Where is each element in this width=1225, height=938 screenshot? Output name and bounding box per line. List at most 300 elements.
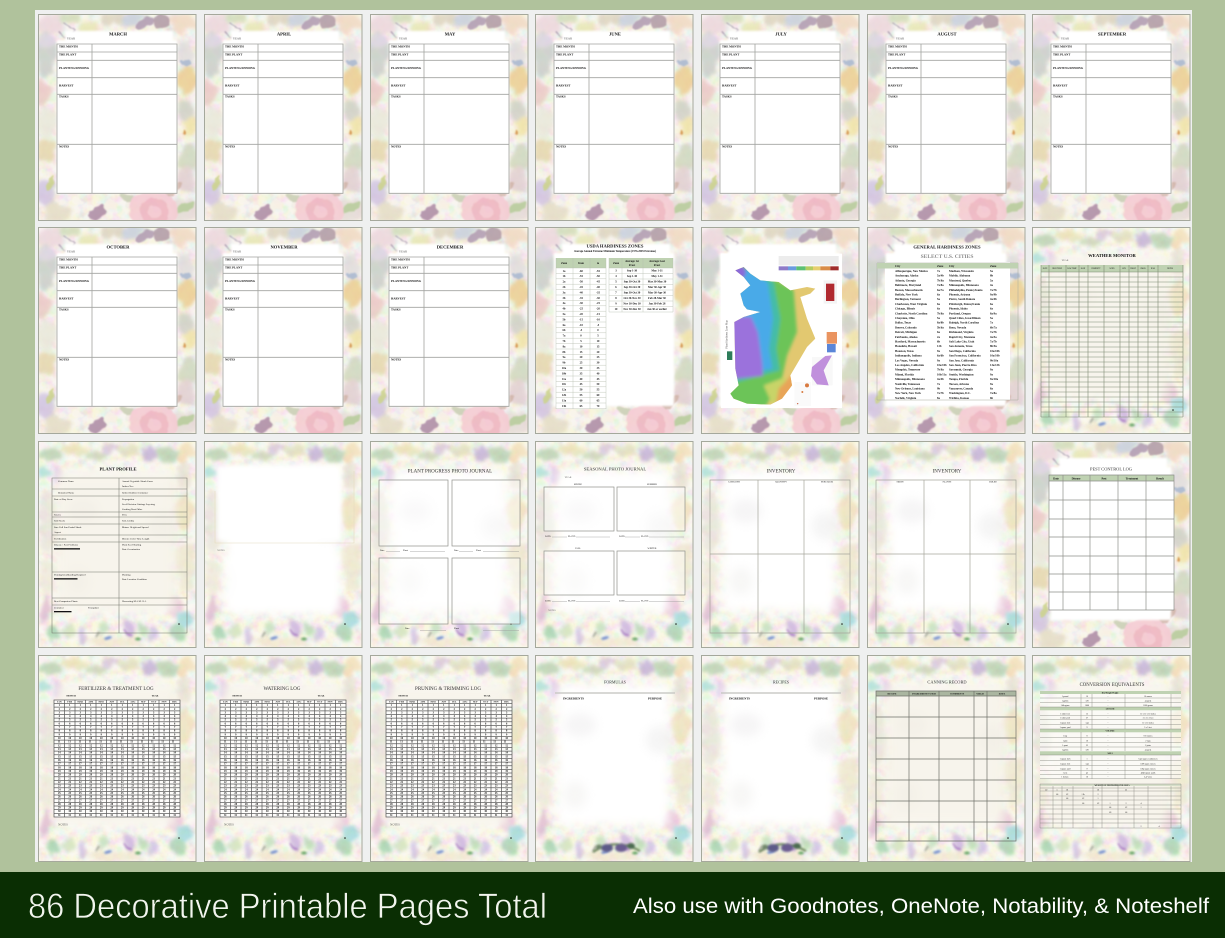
field labels: TASKS xyxy=(59,308,69,312)
panel: December page xyxy=(366,226,531,443)
table: cities and zones: Dallas, Texas xyxy=(895,321,912,325)
heading: December: DECEMBER xyxy=(437,244,464,250)
form labels: Source xyxy=(54,514,62,516)
log calendar numbers: 21 21 21 21 21 21 21 21 21 21 21 21 xyxy=(58,777,177,780)
log calendar numbers: NOV xyxy=(328,700,333,704)
table: weather log: NOTES xyxy=(1167,268,1173,270)
log calendar numbers: JUN xyxy=(441,700,446,704)
date and plant lines: PLANT: xyxy=(568,535,576,538)
field labels: HARVEST xyxy=(391,297,405,301)
subheading: select cities: SELECT U.S. CITIES xyxy=(921,254,973,260)
table: cities and zones: 9a xyxy=(937,349,940,353)
log calendar numbers: MAR xyxy=(77,700,83,704)
log calendar numbers: 12 12 12 12 12 12 12 12 12 12 12 12 xyxy=(224,744,343,747)
table: frost dates: Mar 30-Apr 30 xyxy=(648,292,667,294)
field labels: HARVEST xyxy=(225,297,239,301)
table: cities and zones: 6b xyxy=(990,396,993,400)
log calendar numbers: 9 9 9 9 9 9 9 9 9 9 9 9 xyxy=(225,733,342,736)
table: application rates: 1 xyxy=(1110,803,1111,805)
log calendar numbers: 3 3 3 3 3 3 3 3 3 3 3 3 xyxy=(225,711,342,714)
table: cities and zones: Madison, Wisconsin xyxy=(949,269,974,273)
table: measure conversions: = xyxy=(1107,740,1109,742)
table: zone temperatures: 5 xyxy=(597,335,599,338)
table: cities and zones: 5a xyxy=(990,269,993,273)
table: zone temperatures: 5b xyxy=(563,318,566,321)
table: zone temperatures: 35 xyxy=(580,372,583,375)
date and plant lines: PLANT: xyxy=(641,600,649,602)
table: zone temperatures: 70 xyxy=(597,405,600,408)
field labels: THE MONTH xyxy=(888,44,907,48)
log calendar numbers: 10 10 10 10 10 10 10 10 10 10 10 10 xyxy=(58,737,177,740)
table: measure conversions: 1 square inch xyxy=(1060,757,1070,760)
date and plant lines: Plant: xyxy=(476,550,481,552)
form labels: Grafting Root Other xyxy=(122,508,142,511)
heading: inventory: INVENTORY xyxy=(933,470,962,474)
log calendar numbers: 3 3 3 3 3 3 3 3 3 3 3 3 xyxy=(391,711,508,714)
table: measure conversions: = xyxy=(1107,718,1109,720)
panel: August page xyxy=(863,13,1028,230)
table: zone temperatures: -10 xyxy=(596,318,600,321)
form labels: Seed Division Cuttings Layering xyxy=(122,503,156,506)
log calendar numbers: 11 11 11 11 11 11 11 11 11 11 11 11 xyxy=(390,741,507,744)
table: application rates: 1/2 xyxy=(1066,794,1068,796)
table: zone temperatures: 10 xyxy=(580,345,583,348)
log calendar numbers: 2 2 2 2 2 2 2 2 2 2 2 2 xyxy=(59,708,176,711)
table: measure conversions: = xyxy=(1107,696,1109,698)
field labels: THE PLANT xyxy=(59,266,76,270)
inset: Alaska xyxy=(811,355,833,385)
log calendar numbers: 2 2 2 2 2 2 2 2 2 2 2 2 xyxy=(391,708,508,711)
table: cities and zones: Zone xyxy=(990,264,997,268)
month and year labels xyxy=(398,694,491,698)
log calendar numbers: 29 29 29 29 29 29 29 29 29 29 29 29 xyxy=(390,807,509,810)
field labels: PLANTING/SEEDING xyxy=(59,66,90,70)
subheading: Average Annual Extreme Minimum Temperature (1976-2005 Extremes) xyxy=(574,250,656,253)
notes label: NOTES xyxy=(224,822,234,826)
panel: inventory page one xyxy=(701,441,860,648)
field labels: NOTES xyxy=(225,358,236,362)
log calendar numbers: 16 16 16 16 16 16 16 16 16 16 16 16 xyxy=(224,759,343,762)
field labels: THE MONTH xyxy=(391,258,410,262)
table: weather log: HUMIDITY xyxy=(1091,268,1101,270)
table: measure conversions: 2.47 acres xyxy=(1144,777,1152,779)
log calendar numbers: 12 12 12 12 12 12 12 12 12 12 12 12 xyxy=(390,744,509,747)
table: cities and zones: 7a xyxy=(990,321,993,325)
table: pest log: Treatment xyxy=(1126,477,1138,480)
month and year labels: MONTH xyxy=(66,694,76,698)
table: zone temperatures: 50 xyxy=(597,383,600,386)
table: measure conversions: 1000 grams xyxy=(1143,704,1153,707)
panel: notes page xyxy=(204,441,362,648)
table: cities and zones: New Orleans, Louisiana xyxy=(895,386,925,390)
panel: July page xyxy=(697,13,862,230)
table: cities and zones: Salt Lake City, Utah xyxy=(949,340,975,344)
table: measure conversions: 144 xyxy=(1086,763,1088,765)
photo area outline xyxy=(215,471,354,543)
table: weather log: RAIN xyxy=(1081,267,1086,270)
log calendar numbers: 7 7 7 7 7 7 7 7 7 7 7 7 xyxy=(391,726,508,729)
log calendar numbers: 6 6 6 6 6 6 6 6 6 6 6 6 xyxy=(391,722,508,725)
log calendar numbers: DEC xyxy=(504,700,510,704)
table: measure conversions: 16 xyxy=(1086,740,1088,742)
table: measure conversions: = xyxy=(1107,700,1109,702)
column headers: BULBS xyxy=(989,482,997,484)
table: zone temperatures: -20 xyxy=(596,308,600,311)
table: measure conversions: 1 gallon xyxy=(1062,699,1068,702)
log calendar numbers: 5 5 5 5 5 5 5 5 5 5 5 5 xyxy=(391,719,508,722)
table: weather log xyxy=(1041,265,1183,417)
field labels: NOTES xyxy=(556,144,567,148)
table: cities and zones: 6a/7a xyxy=(937,288,944,292)
field labels xyxy=(556,44,587,148)
table: measure conversions: = xyxy=(1107,705,1109,707)
table: measure conversions: 1 acre xyxy=(1063,772,1068,774)
table: cities and zones: Richmond, Virginia xyxy=(949,330,974,334)
log calendar numbers: 31 31 31 31 31 31 31 31 31 31 31 31 xyxy=(58,814,177,817)
table: cities and zones: 7b/8a xyxy=(937,278,944,282)
field labels: HARVEST xyxy=(59,297,73,301)
field labels xyxy=(225,44,256,148)
field labels: NOTES xyxy=(59,144,70,148)
table: pest log xyxy=(1049,475,1174,610)
date and plant lines: PLANT: xyxy=(568,600,576,602)
log calendar numbers: DEC xyxy=(172,700,178,704)
table: frost dates: 5 xyxy=(615,280,617,284)
field labels: NOTES xyxy=(391,358,402,362)
panel: USDA hardiness zones page xyxy=(531,226,696,443)
log calendar numbers: 22 22 22 22 22 22 22 22 22 22 22 22 xyxy=(390,781,509,784)
notes label: NOTES xyxy=(390,822,400,826)
table: cities and zones: 6a xyxy=(937,330,940,334)
table: cities and zones: 4a/5a xyxy=(990,335,997,339)
panel: recipes page xyxy=(701,655,860,862)
table: measure conversions: 1 square foot xyxy=(1060,762,1071,765)
log calendar numbers: 21 21 21 21 21 21 21 21 21 21 21 21 xyxy=(224,777,343,780)
log calendar numbers: 10 10 10 10 10 10 10 10 10 10 10 10 xyxy=(390,737,509,740)
heading: May: MAY xyxy=(445,32,456,36)
form labels: Common Name xyxy=(58,480,75,483)
log calendar numbers: 11 11 11 11 11 11 11 11 11 11 11 11 xyxy=(58,741,175,744)
table: zone temperatures: 0 xyxy=(597,329,599,332)
table: application rates: 1/2 xyxy=(1125,807,1127,809)
table: measure conversions: = xyxy=(1107,749,1109,751)
table: measure conversions: 6.45 square centimeters xyxy=(1139,757,1158,760)
table: cities and zones: 6b xyxy=(937,340,940,344)
table: application rates: 1/4 xyxy=(1082,803,1084,805)
table: cities and zones: Philadelphia, Pennsylvania xyxy=(949,288,983,292)
field labels: THE PLANT xyxy=(722,52,739,56)
column headers xyxy=(728,480,834,484)
table: cities and zones: 7a/7b xyxy=(990,340,997,344)
date and plant lines: DATE: xyxy=(619,535,626,538)
table: weather log: SNOW xyxy=(1140,268,1146,270)
form labels xyxy=(54,480,156,610)
panel: canning record page xyxy=(867,655,1026,862)
table: frost dates: Sep 30-Oct 30 xyxy=(624,280,641,284)
log calendar numbers: SEP xyxy=(473,700,478,704)
table: cities and zones: Albuquerque, New Mexico xyxy=(895,269,929,273)
table: frost dates: May 1-31 xyxy=(651,275,663,278)
field labels: THE PLANT xyxy=(225,52,242,56)
log calendar numbers: AUG xyxy=(130,700,136,704)
field labels: TASKS xyxy=(1053,94,1063,98)
log calendar numbers: 20 20 20 20 20 20 20 20 20 20 20 20 xyxy=(390,774,509,777)
log calendar numbers: JUN xyxy=(275,700,280,704)
panel: September page xyxy=(1028,13,1193,230)
table: application rates: 1/4 xyxy=(1066,798,1068,800)
table: zone temperatures: 2a xyxy=(563,281,566,284)
heading: April: APRIL xyxy=(277,32,291,36)
table: cities and zones: 6a/6b xyxy=(937,354,944,358)
table: zone temperatures: 13b xyxy=(562,405,567,408)
inset: small legend blocks xyxy=(827,332,837,352)
log calendar numbers: 20 20 20 20 20 20 20 20 20 20 20 20 xyxy=(58,774,177,777)
table: zone temperatures: 55 xyxy=(580,394,583,397)
log calendar numbers: 9 9 9 9 9 9 9 9 9 9 9 9 xyxy=(391,733,508,736)
table: cities and zones xyxy=(877,262,1018,400)
form labels: Best Companion Plants xyxy=(54,600,78,603)
table: cities and zones: 6b/7a xyxy=(990,325,997,329)
log calendar numbers: JAN xyxy=(57,700,62,704)
table: measure conversions: 1 cubic yard xyxy=(1060,718,1070,720)
log calendar numbers: 8 8 8 8 8 8 8 8 8 8 8 8 xyxy=(391,730,508,733)
table: zone temperatures: 1a xyxy=(563,270,566,273)
field labels: THE MONTH xyxy=(1053,44,1072,48)
log calendar numbers: 25 25 25 25 25 25 25 25 25 25 25 25 xyxy=(58,792,177,795)
table: measure conversions: 1 square foot xyxy=(1060,721,1071,724)
log calendar numbers: 31 31 31 31 31 31 31 31 31 31 31 31 xyxy=(224,814,343,817)
table: application rates: 1/4 xyxy=(1125,812,1127,814)
column headers: INGREDIENTS xyxy=(563,696,584,700)
field labels: THE PLANT xyxy=(556,52,573,56)
table: cities and zones: Houston, Texas xyxy=(895,349,915,353)
table: canning: DATE xyxy=(999,692,1006,696)
field labels xyxy=(722,44,753,148)
table: zone temperatures: 4b xyxy=(563,308,566,311)
table: cities and zones: Baltimore, Maryland xyxy=(895,283,922,287)
icon: flower cluster xyxy=(759,843,806,852)
field labels xyxy=(225,258,256,362)
log calendar numbers: 18 18 18 18 18 18 18 18 18 18 18 18 xyxy=(58,766,177,769)
season labels: SUMMER xyxy=(647,484,657,486)
table: zone temperatures: 25 xyxy=(597,356,600,359)
column headers: SEEDS xyxy=(896,482,904,484)
table: measure conversions: 0.09 square meters xyxy=(1140,762,1156,765)
table: measure conversions: 0.84 square meters xyxy=(1140,767,1156,770)
column headers: QUANTITY xyxy=(775,480,787,484)
table: canning: YIELD xyxy=(976,692,984,696)
column headers: PURPOSE xyxy=(648,696,662,700)
table: weather log: LOW TEMP xyxy=(1067,268,1077,270)
form labels: Date Location Condition xyxy=(122,578,148,581)
table: measure conversions: AREA xyxy=(1107,752,1113,755)
log calendar numbers: 19 19 19 19 19 19 19 19 19 19 19 19 xyxy=(224,770,343,773)
table: cities and zones: Mobile, Alabama xyxy=(949,274,971,278)
table: cities and zones: Seattle, Washington xyxy=(949,372,974,376)
table: measure conversions: 128 xyxy=(1086,700,1088,702)
table: weather log: SUN xyxy=(1122,268,1126,270)
log calendar numbers: 30 30 30 30 30 30 30 30 30 30 30 30 xyxy=(390,810,509,813)
table: frost dates: 9 xyxy=(615,302,617,306)
log calendar numbers: FEB xyxy=(233,700,238,704)
table: frost dates: Zone xyxy=(613,262,620,265)
table: zone temperatures: -20 xyxy=(579,313,583,316)
table: zone temperatures: -15 xyxy=(579,318,583,321)
form labels: Soil Needs xyxy=(54,520,65,522)
table: cities and zones: San Diego, California xyxy=(949,349,976,353)
table: application rates: 4 xyxy=(1140,803,1142,805)
table: zone temperatures: -40 xyxy=(596,286,600,289)
table: cities and zones: Phoenix, Idaho xyxy=(949,307,968,311)
heading: November: NOVEMBER xyxy=(270,244,298,250)
log calendar numbers: FEB xyxy=(67,700,72,704)
field labels: THE MONTH xyxy=(722,44,741,48)
heading: canning record: CANNING RECORD xyxy=(927,680,967,684)
footer note: Also use with Goodnotes, OneNote, Notability, & Noteshelf xyxy=(633,894,1209,918)
table: cities and zones: Buffalo, New York xyxy=(895,292,918,296)
table: measure conversions: 1 square yard xyxy=(1060,767,1070,770)
log calendar numbers: 4 4 4 4 4 4 4 4 4 4 4 4 xyxy=(391,715,508,718)
field labels: TASKS xyxy=(888,94,898,98)
column headers: CATEGORY xyxy=(728,480,740,484)
table: cities and zones: Anchorage, Alaska xyxy=(895,274,919,278)
table: frost dates: Frost xyxy=(654,264,660,267)
table: frost dates xyxy=(609,258,673,312)
map: USA hardiness zones xyxy=(730,267,816,405)
table: zone temperatures: 25 xyxy=(580,362,583,365)
table: cities and zones: 4a xyxy=(990,283,993,287)
panel: weather monitor page xyxy=(1032,227,1190,434)
notes area xyxy=(230,553,338,611)
heading: weather monitor: WEATHER MONITOR xyxy=(1088,253,1137,258)
table: cities and zones: San Francisco, California xyxy=(949,354,981,358)
table: zone temperatures: 9b xyxy=(563,362,566,365)
log calendar numbers: 5 5 5 5 5 5 5 5 5 5 5 5 xyxy=(225,719,342,722)
log calendar numbers: 13 13 13 13 13 13 13 13 13 13 13 13 xyxy=(390,748,509,751)
table: measure conversions: 4 quarts xyxy=(1145,748,1151,751)
log calendar numbers: 8 8 8 8 8 8 8 8 8 8 8 8 xyxy=(225,730,342,733)
table: cities and zones: Washington, D.C. xyxy=(949,391,971,395)
field labels: THE MONTH xyxy=(556,44,575,48)
column headers: INGREDIENTS xyxy=(729,696,750,700)
table: cities and zones: Wichita, Kansas xyxy=(949,396,970,400)
table: measure conversions: 144 xyxy=(1086,722,1088,724)
table: measure conversions: = xyxy=(1107,768,1109,770)
table: frost dates: 6 xyxy=(615,286,617,289)
form labels: Plant Seed Starting xyxy=(122,544,142,546)
year label: YEAR xyxy=(896,36,904,40)
table: frost dates: 3 xyxy=(615,270,617,272)
table: cities and zones: Charlotte, North Carolina xyxy=(895,311,928,315)
table: zone temperatures: 7a xyxy=(563,335,566,338)
table: cities and zones: Phoenix, Arizona xyxy=(949,292,971,296)
heading: plant progress photo journal: PLANT PROGRESS PHOTO JOURNAL xyxy=(408,470,492,474)
form labels: Propagation xyxy=(122,498,135,501)
table: cities and zones: Honolulu, Hawaii xyxy=(895,344,917,348)
photo area xyxy=(217,465,341,541)
table: application rates: 1/2 xyxy=(1097,803,1099,805)
table: cities and zones: Fairbanks, Alaska xyxy=(895,335,918,339)
form labels: Bloom: Color Time Length xyxy=(122,538,150,540)
table: measure conversions: = xyxy=(1107,722,1109,724)
form labels: Sun: Full Sun Partial Shade xyxy=(54,526,83,529)
month and year labels xyxy=(232,694,325,698)
log calendar numbers: 30 30 30 30 30 30 30 30 30 30 30 30 xyxy=(224,810,343,813)
table: cities and zones: Savannah, Georgia xyxy=(949,368,973,372)
table: cities and zones: 7a/8a xyxy=(937,283,944,287)
log calendar numbers: 1 1 1 1 1 1 1 1 1 1 1 1 xyxy=(59,704,176,707)
year label: YEAR xyxy=(1062,259,1069,262)
log calendar numbers: AUG xyxy=(296,700,302,704)
log calendar numbers: APR xyxy=(420,700,425,704)
heading: WATERING LOG xyxy=(263,687,301,692)
date and plant lines: Plant: xyxy=(403,550,408,552)
table: cities and zones: San Jose, California xyxy=(949,358,974,362)
table: cities and zones: 6a xyxy=(937,307,940,311)
table: application rates: 1/4 xyxy=(1056,794,1058,796)
panel: fertilizer and treatment log page xyxy=(38,655,196,862)
table: cities and zones: San Juan, Puerto Rico xyxy=(949,363,977,367)
season labels: WINTER xyxy=(648,548,657,550)
log calendar numbers: JUL xyxy=(286,700,291,704)
log calendar numbers: 4 4 4 4 4 4 4 4 4 4 4 4 xyxy=(59,715,176,718)
form labels: Botanical Name xyxy=(58,492,75,494)
table: zone temperatures: 30 xyxy=(580,367,583,370)
form labels: Price xyxy=(122,514,128,516)
heading: October: OCTOBER xyxy=(107,244,130,250)
table: weather log: WIND xyxy=(1110,268,1115,270)
table: measure conversions: 3 x 3 feet xyxy=(1144,726,1152,729)
field labels: THE PLANT xyxy=(225,266,242,270)
table: zone temperatures: -45 xyxy=(579,286,583,289)
table: cities and zones: 9b xyxy=(937,386,940,390)
log calendar numbers: 22 22 22 22 22 22 22 22 22 22 22 22 xyxy=(58,781,177,784)
divider xyxy=(721,692,841,694)
table: zone temperatures: 11a xyxy=(562,378,567,381)
panel: November page xyxy=(200,226,365,443)
season labels: FALL xyxy=(575,547,581,550)
field labels: THE MONTH xyxy=(391,44,410,48)
field labels: PLANTING/SEEDING xyxy=(1053,66,1084,70)
table: cities and zones: 6a xyxy=(990,302,993,306)
table: zone temperatures: 2b xyxy=(563,286,566,289)
table: application rates: 5 xyxy=(1056,790,1058,792)
table: application rates: 4 xyxy=(1158,826,1160,828)
log calendar numbers: 23 23 23 23 23 23 23 23 23 23 23 23 xyxy=(58,785,177,788)
log calendar numbers: 2 2 2 2 2 2 2 2 2 2 2 2 xyxy=(225,708,342,711)
table: application rates: 2 xyxy=(1140,826,1142,828)
log calendar numbers: JUL xyxy=(452,700,457,704)
table: cities and zones: Rapid City, Montana xyxy=(949,335,976,339)
field labels: TASKS xyxy=(556,94,566,98)
table: zone temperatures xyxy=(556,258,606,409)
table: application rates xyxy=(1040,784,1181,828)
table: frost dates: 8 xyxy=(615,297,617,300)
field labels: THE MONTH xyxy=(59,258,78,262)
table: cities and zones: Chicago, Illinois xyxy=(895,307,916,311)
table: cities and zones: Denver, Colorado xyxy=(895,325,917,329)
table: pest log: Pest xyxy=(1102,477,1107,480)
table: cities and zones: 8a/9a xyxy=(990,311,997,315)
log calendar numbers: 17 17 17 17 17 17 17 17 17 17 17 17 xyxy=(224,763,343,766)
table: cities and zones: 9a xyxy=(990,382,993,386)
table: cities and zones: Tucson, Arizona xyxy=(949,382,970,386)
log calendar numbers: 20 20 20 20 20 20 20 20 20 20 20 20 xyxy=(224,774,343,777)
table: zone temperatures: -15 xyxy=(596,313,600,316)
month and year labels: MONTH xyxy=(232,694,242,698)
year label: YEAR xyxy=(233,36,241,40)
log calendar numbers: 7 7 7 7 7 7 7 7 7 7 7 7 xyxy=(225,726,342,729)
